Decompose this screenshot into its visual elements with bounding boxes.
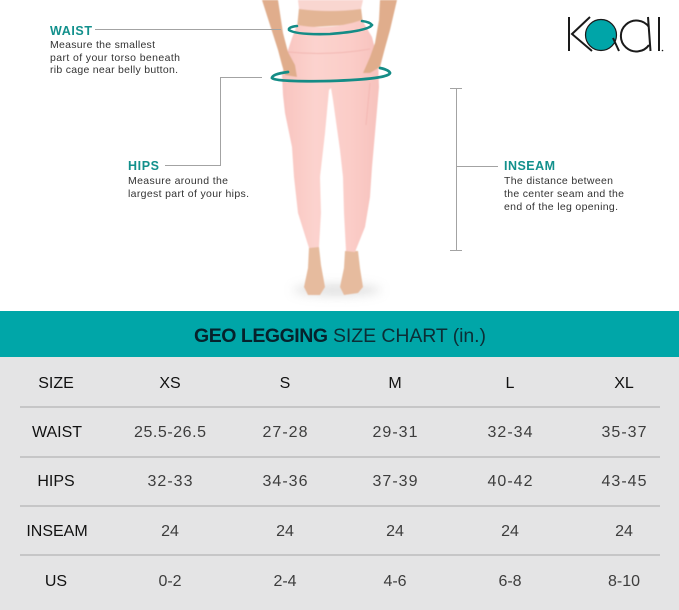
row: hips: 37-39 bbox=[372, 473, 418, 490]
row: waist: 32-34 bbox=[488, 424, 533, 441]
row: size: XS bbox=[159, 375, 181, 392]
waistband seam and pocket seam bbox=[288, 49, 370, 125]
teal title band bbox=[0, 311, 679, 357]
inseam callout: the center seam and the bbox=[504, 188, 624, 200]
row: waist: 35-37 bbox=[602, 424, 647, 441]
row: inseam: INSEAM bbox=[26, 523, 88, 540]
row: us: 6-8 bbox=[498, 573, 522, 590]
hips measuring band bbox=[272, 68, 390, 81]
row: hips bbox=[37, 473, 647, 490]
title: GEO LEGGING bbox=[194, 325, 328, 347]
leggings bbox=[282, 20, 379, 252]
inseam callout: INSEAM bbox=[504, 159, 555, 173]
logo: Kaai bbox=[569, 17, 663, 51]
row: us: 4-6 bbox=[383, 573, 407, 590]
row: waist: 25.5-26.5 bbox=[134, 424, 206, 441]
row: inseam: 24 bbox=[386, 523, 404, 540]
waist callout bbox=[50, 24, 180, 76]
row: inseam bbox=[26, 523, 633, 540]
row: hips: HIPS bbox=[37, 473, 75, 490]
right foot bbox=[340, 251, 363, 295]
inseam bracket bbox=[450, 88, 498, 250]
row: us: 2-4 bbox=[273, 573, 297, 590]
row: us bbox=[45, 573, 640, 590]
row: waist: 29-31 bbox=[372, 424, 418, 441]
title: SIZE CHART (in.) bbox=[333, 325, 486, 347]
row: inseam: 24 bbox=[161, 523, 179, 540]
left arm bbox=[262, 0, 297, 77]
row: us: 0-2 bbox=[158, 573, 182, 590]
figure: model wearing leggings bbox=[262, 0, 397, 296]
waist callout: Measure the smallest bbox=[50, 39, 155, 51]
row: waist: 27-28 bbox=[262, 424, 308, 441]
row: us: US bbox=[45, 573, 67, 590]
row: size: S bbox=[280, 375, 290, 392]
waist callout: WAIST bbox=[50, 24, 92, 38]
row: inseam: 24 bbox=[501, 523, 519, 540]
row: inseam: 24 bbox=[615, 523, 633, 540]
inseam callout: The distance between bbox=[504, 175, 613, 187]
row: hips: 40-42 bbox=[488, 473, 533, 490]
row: hips: 43-45 bbox=[602, 473, 647, 490]
inseam callout: end of the leg opening. bbox=[504, 201, 618, 213]
waist callout: part of your torso beneath bbox=[50, 52, 180, 64]
row: size: SIZE bbox=[38, 375, 74, 392]
torso skin bbox=[297, 8, 363, 28]
size table bbox=[0, 357, 679, 610]
row: hips: 34-36 bbox=[262, 473, 308, 490]
row: hips: 32-33 bbox=[148, 473, 193, 490]
waist callout: rib cage near belly button. bbox=[50, 64, 178, 76]
hips callout: Measure around the bbox=[128, 175, 228, 187]
hips leader line bbox=[165, 78, 262, 166]
hips callout: HIPS bbox=[128, 159, 159, 173]
row: size: XL bbox=[614, 375, 634, 392]
row: waist bbox=[32, 424, 647, 441]
right arm bbox=[363, 0, 397, 73]
inseam callout bbox=[504, 159, 624, 213]
row: waist: WAIST bbox=[32, 424, 82, 441]
hips callout: largest part of your hips. bbox=[128, 188, 249, 200]
row: us: 8-10 bbox=[608, 573, 640, 590]
crop top bbox=[298, 0, 363, 11]
row: inseam: 24 bbox=[276, 523, 294, 540]
row: size bbox=[38, 375, 634, 392]
waist leader line bbox=[95, 28, 281, 30]
hips callout bbox=[128, 159, 249, 200]
waist measuring band bbox=[289, 21, 372, 34]
row: size: L bbox=[506, 375, 515, 392]
left foot bbox=[304, 247, 325, 295]
row: size: M bbox=[388, 375, 402, 392]
